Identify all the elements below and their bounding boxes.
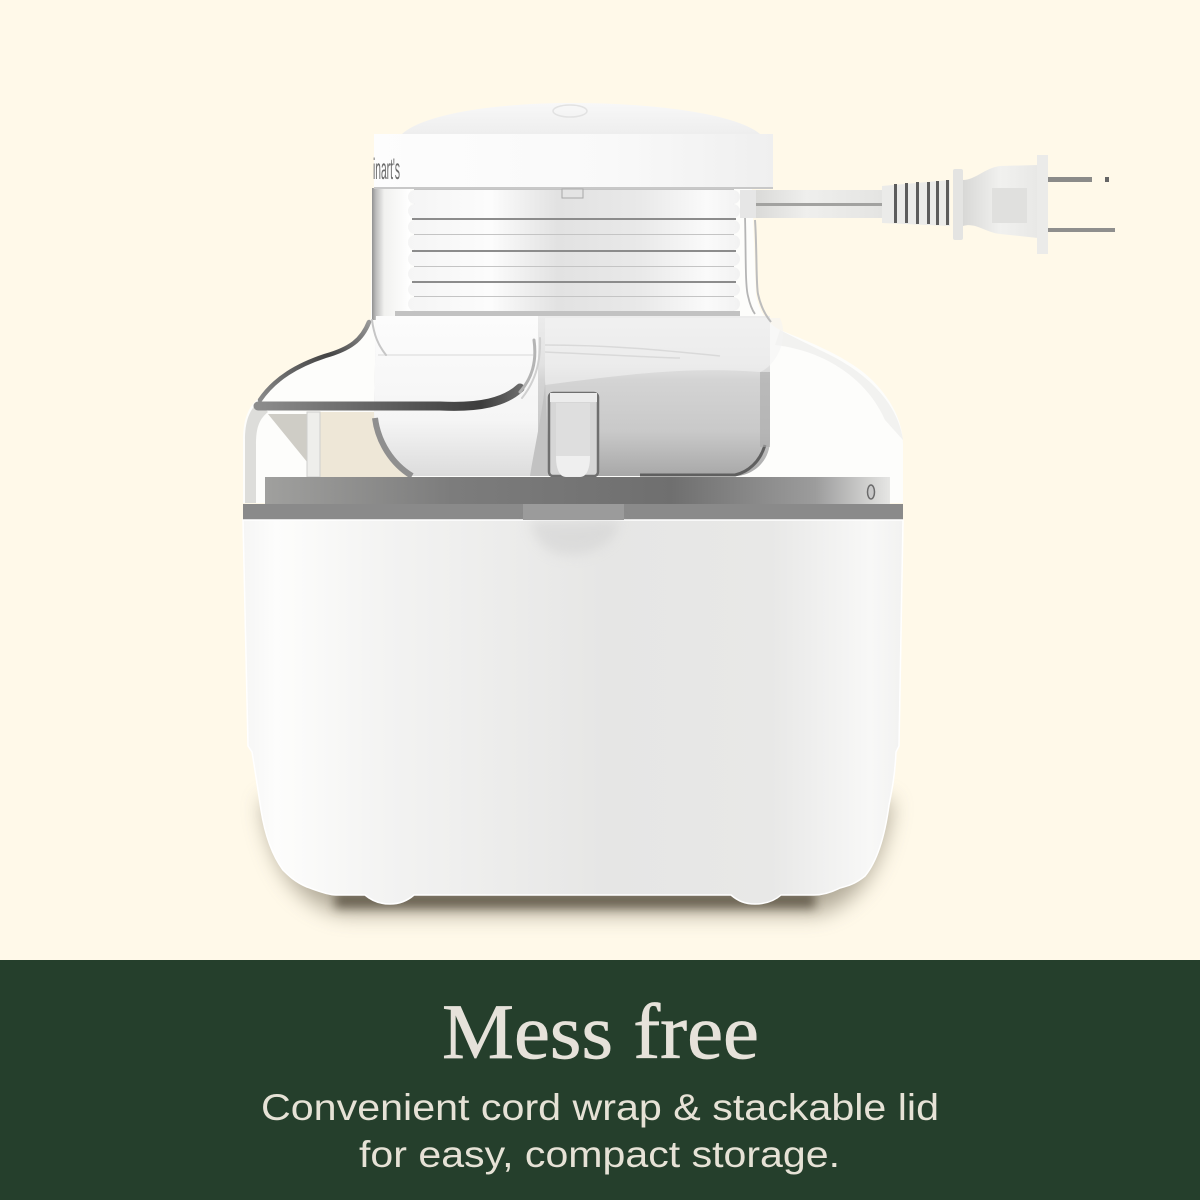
strain relief: [882, 180, 950, 226]
lid button ring: [553, 105, 587, 117]
shoulder highlight over bowl: [545, 318, 783, 385]
flange: [1037, 155, 1048, 254]
clear lid left wall: [245, 402, 268, 503]
power cord: [756, 190, 883, 218]
dark green caption panel: [0, 960, 1200, 1200]
base body: [243, 520, 903, 904]
description line two: for easy, compact storage.: [359, 1134, 840, 1175]
lid band: [374, 134, 773, 188]
bowl right reflection lines: [545, 345, 720, 358]
lid band lower edge: [374, 187, 773, 189]
plug: [882, 155, 1115, 254]
heading: Mess free: [442, 988, 759, 1075]
clear shoulder sheen: [775, 330, 903, 440]
small clip under lid: [562, 189, 583, 198]
ice cream maker product illustration: [243, 103, 1115, 914]
bowl dark lower edge: [375, 418, 412, 476]
cream background: [0, 0, 1200, 960]
top prong tip: [1105, 177, 1109, 182]
strain relief ribs: [894, 180, 949, 225]
right clear neck wall: [740, 190, 771, 322]
coiled power cord wrap: [395, 188, 740, 316]
collar: [953, 169, 963, 240]
drop shadow under machine: [262, 800, 892, 914]
description line one: Convenient cord wrap & stackable lid: [261, 1087, 939, 1128]
beige see-through area: [320, 412, 412, 477]
bowl rim line: [378, 354, 533, 356]
plug inset: [992, 188, 1027, 223]
clear wedge: [268, 414, 312, 468]
inner bowl: [374, 316, 783, 476]
clear divider post: [307, 412, 320, 477]
tray screw detail: [868, 485, 874, 499]
top lid dome: [402, 103, 760, 134]
ice cream maker product illustration: inart's: [373, 153, 400, 186]
lid latch: [530, 380, 598, 477]
black cord handle lines on clear lid: [258, 320, 540, 406]
bottom prong: [1048, 228, 1115, 232]
clear outer lid: [243, 188, 903, 503]
top prong: [1048, 177, 1092, 182]
body top seam band: [243, 504, 903, 520]
bowl dark right base: [640, 445, 765, 475]
grey tray plate: [265, 477, 890, 504]
latch tab on seam with shadow: [523, 504, 624, 555]
plug housing: [963, 165, 1038, 238]
upper clear housing wall: [372, 188, 410, 320]
bowl right rim: [760, 372, 770, 447]
